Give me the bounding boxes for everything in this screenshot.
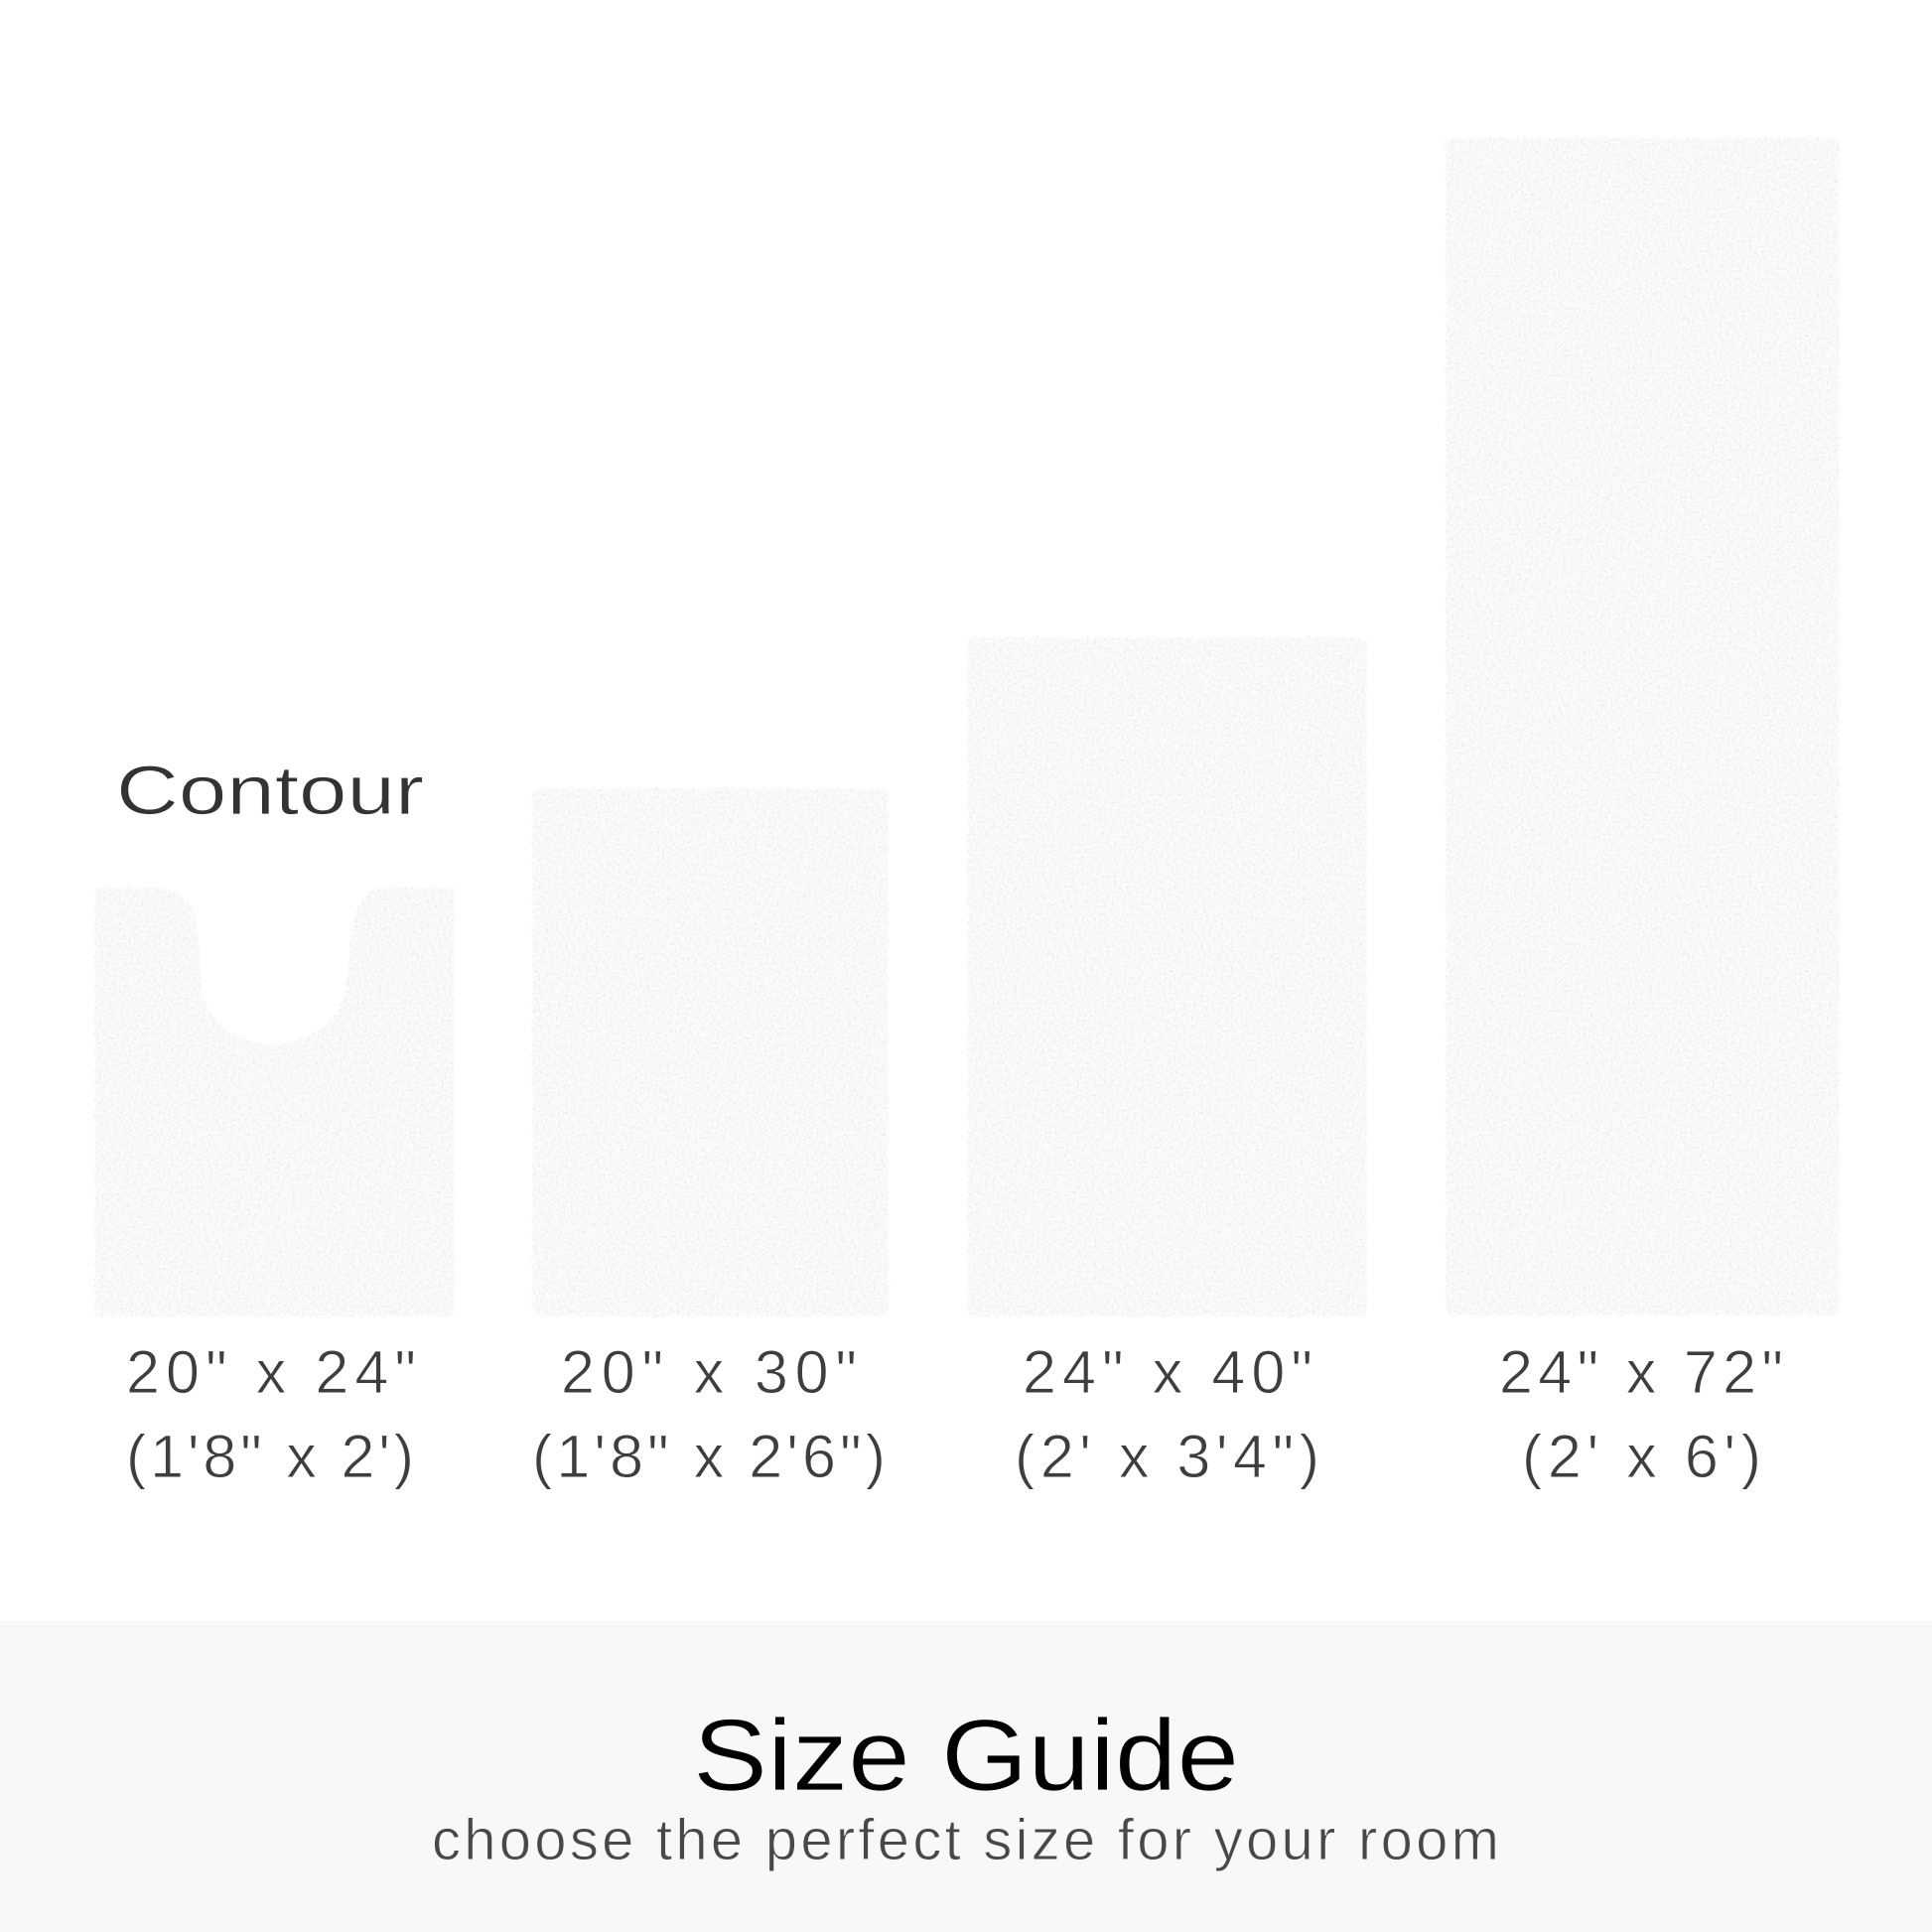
size label: 24 x 40 [1015, 1338, 1319, 1490]
size label: 20 x 24 [126, 1338, 416, 1490]
size label: 24 x 72 [1499, 1338, 1783, 1490]
size label: 20 x 30: (1'8" x 2'6") [532, 1423, 886, 1490]
size label: 24 x 72: (2' x 6') [1522, 1423, 1761, 1490]
size label: 20 x 30 [532, 1338, 886, 1490]
size label: 24 x 40: (2' x 3'4") [1015, 1423, 1319, 1490]
size label: 24 x 40: 24" x 40" [1023, 1338, 1312, 1406]
footer band [0, 1621, 1932, 1932]
subheading: choose the perfect size for your room [432, 1808, 1499, 1872]
rug: contour 20 x 24 [95, 888, 455, 1316]
size label: 20 x 24: 20" x 24" [126, 1338, 416, 1406]
heading: Size Guide [693, 1699, 1239, 1812]
contour label: Contour [116, 752, 424, 829]
size label: 20 x 30: 20" x 30" [561, 1338, 857, 1406]
rug: 20 x 30 [533, 788, 889, 1316]
rug: 24 x 40 [968, 637, 1367, 1316]
rug: 24 x 72 [1447, 138, 1840, 1315]
size label: 24 x 72: 24" x 72" [1499, 1338, 1783, 1406]
size label: 20 x 24: (1'8" x 2') [126, 1423, 414, 1490]
